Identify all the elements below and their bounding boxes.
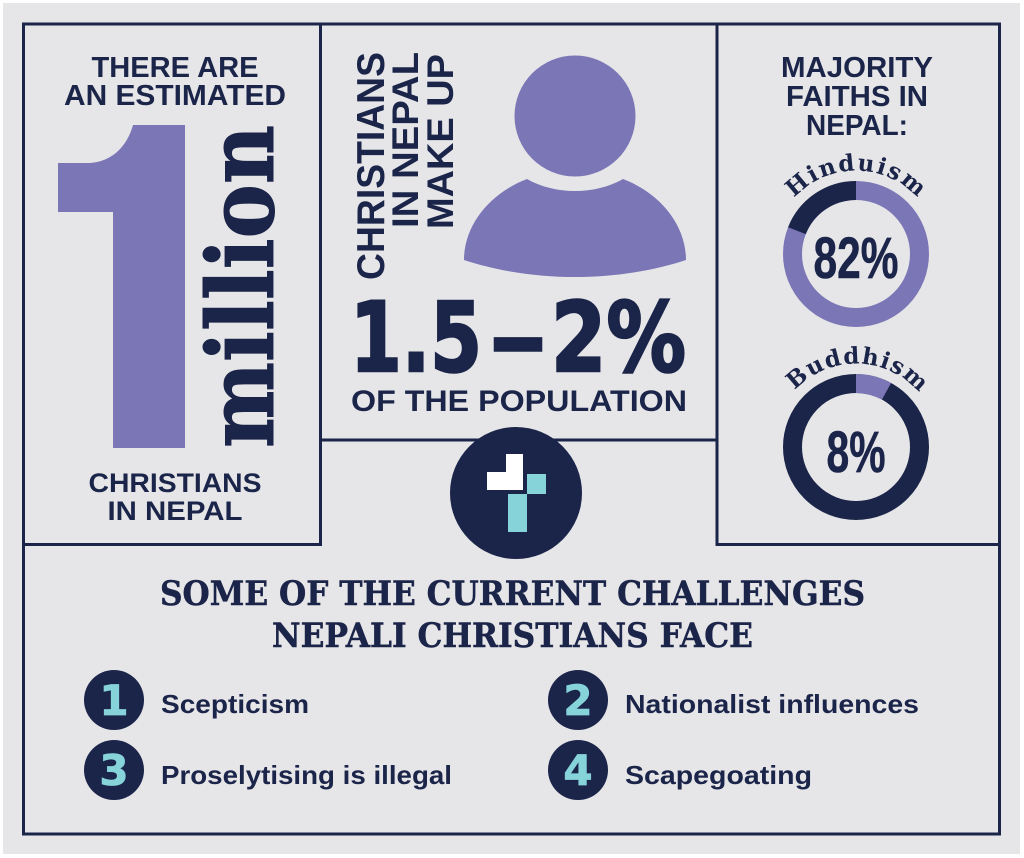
donut: Buddhism 8% — [783, 346, 929, 520]
statistic: 1.5–2%: – — [489, 282, 547, 394]
caption: Christians in Nepal: CHRISTIANS — [88, 468, 262, 498]
heading: some of the current challenges — [160, 574, 865, 656]
donut: Buddhism 8%: 8% — [826, 420, 886, 485]
challenge 2: nationalist influences: Nationalist influences — [625, 689, 919, 719]
caption: of the population: OF THE POPULATION — [351, 385, 687, 418]
heading: majority faiths in Nepal: MAJORITY — [781, 52, 933, 84]
heading: majority faiths in Nepal: FAITHS IN — [786, 81, 928, 113]
challenge 1: scepticism: 1 — [99, 676, 129, 725]
donut: Buddhism 8%: Buddhism — [784, 346, 925, 392]
challenge 4: scapegoating: 4 — [563, 746, 593, 795]
heading: majority faiths in Nepal: NEPAL: — [806, 110, 908, 142]
heading: some of the current challenges: SOME OF THE CURRENT CHALLENGES — [160, 574, 865, 614]
heading: there are an estimated: AN ESTIMATED — [64, 80, 286, 112]
rotated heading: Christians in Nepal make up: MAKE UP — [420, 54, 461, 229]
challenge 3: proselytising is illegal: 3 — [99, 746, 129, 795]
statistic: 1.5–2% — [350, 282, 686, 394]
challenge 4: scapegoating: Scapegoating — [625, 760, 812, 790]
rotated heading: Christians in Nepal make up: IN NEPAL — [385, 52, 426, 228]
challenge 4: scapegoating — [548, 740, 812, 800]
heading: there are an estimated: THERE ARE — [92, 52, 258, 84]
heading: majority faiths in Nepal — [781, 52, 933, 142]
challenge 3: proselytising is illegal — [84, 740, 452, 800]
rotated heading: Christians in Nepal make up — [350, 52, 461, 280]
statistic: 1.5–2%: 1.5 — [350, 282, 482, 394]
rotated heading: Christians in Nepal make up: CHRISTIANS — [350, 52, 393, 280]
word: million: million — [187, 125, 295, 448]
heading: there are an estimated — [64, 52, 286, 112]
donut: Hinduism 82% — [783, 153, 929, 327]
icon: cross logo — [450, 427, 582, 559]
panel: current challenges — [84, 574, 919, 800]
statistic: 1.5–2%: 2% — [551, 282, 686, 394]
panel: population share — [350, 52, 687, 418]
caption: Christians in Nepal — [88, 468, 262, 526]
icon: person — [464, 56, 686, 277]
challenge 2: nationalist influences: 2 — [563, 676, 593, 725]
panel: majority faiths — [781, 52, 933, 520]
panel: one million Christians — [58, 52, 295, 526]
donut: Hinduism 82%: Hinduism — [784, 153, 923, 197]
heading: some of the current challenges: NEPALI CHRISTIANS FACE — [272, 616, 753, 656]
challenge 3: proselytising is illegal: Proselytising is illegal — [161, 760, 452, 790]
caption: Christians in Nepal: IN NEPAL — [108, 496, 242, 526]
challenge 1: scepticism: Scepticism — [161, 689, 309, 719]
donut: Hinduism 82%: 82% — [814, 226, 898, 291]
challenge 1: scepticism — [84, 670, 309, 730]
numeral 1 — [58, 125, 185, 448]
challenge 2: nationalist influences — [548, 670, 919, 730]
